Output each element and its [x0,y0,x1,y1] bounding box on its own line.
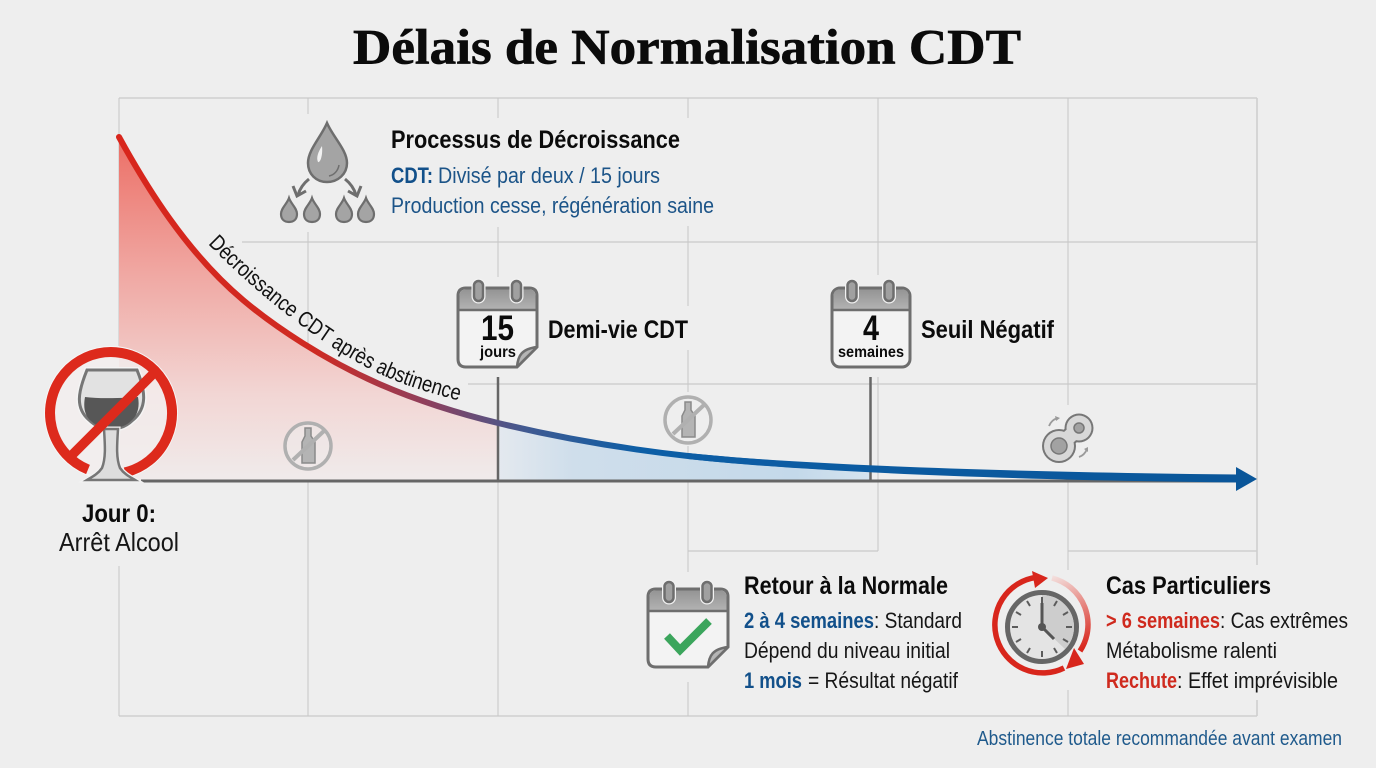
icon: clock with arrows [995,571,1088,673]
text block [744,608,962,693]
text block: : Effet imprévisible [1177,668,1338,693]
background grid [119,98,1257,716]
text block: 2 à 4 semaines [744,608,874,633]
heading: Retour à la Normale [744,572,948,600]
icon: calendar with check [648,582,728,667]
marker: 4 weeks negative threshold [832,281,1055,367]
text block: Production cesse, régénération saine [391,193,714,218]
marker line: 15 days [497,377,499,481]
icon: crossed bottle left [285,423,331,469]
label: Seuil Négatif [921,316,1055,344]
icon: calendar 15 days [458,281,537,367]
thick end of line [688,453,1238,482]
text block: 1 mois [744,668,802,693]
text block: Métabolisme ralenti [1106,638,1277,663]
icon: no alcohol wine glass [45,347,177,480]
decay line [119,137,1238,478]
title: Délais de Normalisation CDT [353,18,1021,74]
text block [1106,608,1348,693]
label: day 0: Jour 0: [82,500,156,528]
text block: : Cas extrêmes [1220,608,1348,633]
text block: Rechute [1106,668,1177,693]
curve label: Décroissance CDT après abstinence [209,234,460,400]
label: day 0: Arrêt Alcool [59,527,179,557]
text block [391,163,714,218]
text block: Divisé par deux / 15 jours [438,163,660,188]
icon: calendar 15 days: jours [479,344,516,361]
label: day 0 [59,500,179,557]
panel: decay process [281,123,714,222]
marker line: 4 weeks [869,377,872,481]
icon: calendar 4 weeks: semaines [838,344,904,361]
marker: 15 days half-life [458,281,688,367]
icon: calendar 4 weeks: 4 [863,309,879,348]
blue area under curve [500,426,870,480]
arrow head [1236,467,1257,491]
red area under curve [119,137,498,481]
text block: > 6 semaines [1106,608,1220,633]
label: Demi-vie CDT [548,316,688,344]
heading: Processus de Décroissance [391,126,680,154]
icon: calendar 4 weeks [832,281,910,367]
panel: return to normal [648,572,962,693]
text block: = Résultat négatif [808,668,959,693]
icon: dividing cell [1042,414,1094,463]
icon: crossed bottle right [665,397,711,443]
icon: calendar 15 days: 15 [481,309,514,348]
text block: : Standard [874,608,962,633]
heading: Cas Particuliers [1106,572,1271,600]
chart: CDT decay curve [79,134,1257,491]
panel: special cases [995,571,1348,693]
text block: Dépend du niveau initial [744,638,950,663]
time axis [141,480,1240,482]
icon: splitting drop [281,123,374,222]
text block: CDT: [391,163,433,188]
